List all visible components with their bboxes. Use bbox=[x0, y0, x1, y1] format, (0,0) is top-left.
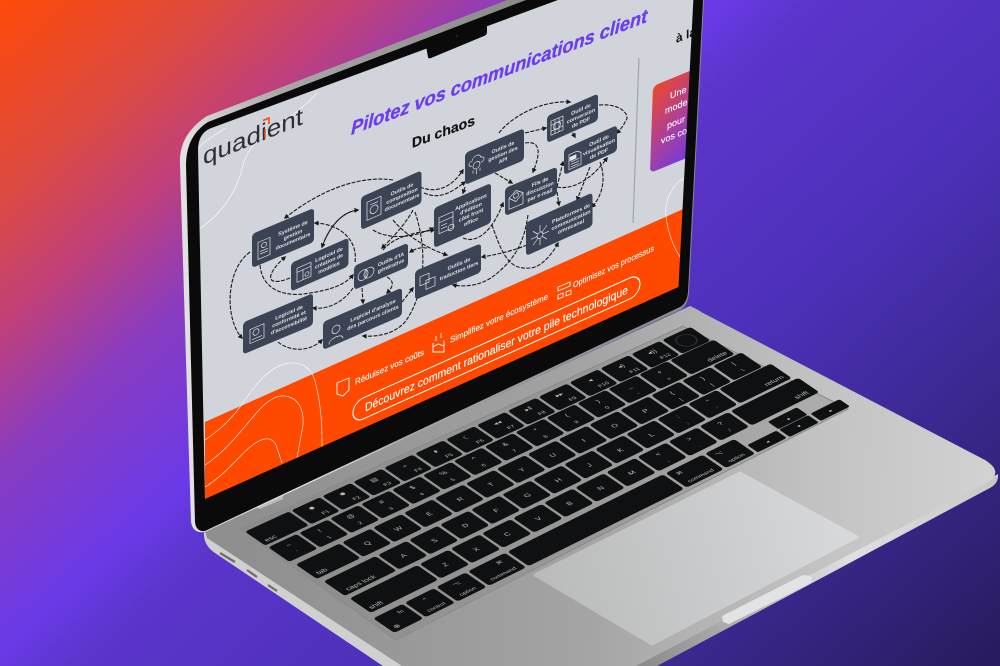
box: Outil de conversion de PDF bbox=[547, 94, 598, 143]
box: Outils de traduction tiers bbox=[415, 243, 481, 300]
function key row: ◂) bbox=[616, 364, 627, 370]
function key row: F7 bbox=[506, 424, 517, 431]
hinge piece bbox=[254, 495, 283, 509]
icon: compliance bbox=[250, 324, 264, 344]
box: Logiciel de création de modèles: création de bbox=[315, 253, 343, 271]
benefits row bbox=[337, 243, 654, 396]
shift key row: , bbox=[665, 459, 672, 463]
keyboard bbox=[245, 327, 850, 633]
shift key row: V bbox=[534, 516, 544, 522]
home key row: K bbox=[616, 447, 626, 453]
box: Outil de visualisation de PDF: Outil de bbox=[589, 134, 609, 149]
home key row: return bbox=[763, 375, 786, 387]
decorative contour lines top-left bbox=[197, 93, 317, 230]
home key row: F bbox=[492, 508, 502, 514]
function key row: ✹ bbox=[337, 491, 349, 498]
qwerty key row: [ bbox=[679, 398, 685, 402]
box: Système de gestion documentaire: Système de bbox=[278, 220, 308, 238]
number key row: ) bbox=[595, 399, 602, 404]
right column heading fragment: à la bbox=[676, 24, 697, 46]
qwerty key row: } bbox=[699, 376, 708, 381]
qwerty key row: W bbox=[393, 525, 405, 532]
box: Outils de traduction tiers: Outils de bbox=[448, 257, 470, 272]
bottom key row: ⌥ bbox=[714, 451, 725, 457]
number key row: 3 bbox=[388, 507, 395, 511]
function key row: ◂ bbox=[586, 378, 595, 383]
bottom key row: ⌥ bbox=[452, 581, 463, 587]
box: Plateformes de communication omnicanal: Plateformes de bbox=[552, 203, 590, 226]
contour lines on band bbox=[205, 363, 322, 487]
icon: templates bbox=[297, 262, 311, 282]
home key row bbox=[324, 364, 792, 596]
box: Applications d'édition côté front office: d'édition bbox=[460, 201, 483, 217]
function key row: ♦ bbox=[432, 449, 441, 454]
box: Plateformes de communication omnicanal bbox=[526, 193, 592, 256]
gradient promo panel: moderne bbox=[665, 91, 700, 116]
number key row: & bbox=[501, 442, 511, 448]
box: Fils de discussion par e-mail: discussion bbox=[526, 180, 554, 198]
qwerty key row: { bbox=[668, 391, 677, 396]
icon: network bbox=[531, 224, 549, 246]
function key row: ▸‖ bbox=[523, 406, 535, 413]
benefit: optimise processes: Optimisez vos processus bbox=[573, 243, 654, 290]
shift key row: . bbox=[696, 444, 703, 448]
icon: API cloud bbox=[468, 154, 484, 174]
bottom key row: control bbox=[426, 602, 448, 613]
shift key row: M bbox=[627, 470, 638, 476]
right side edge bbox=[632, 474, 998, 666]
box: Applications d'édition côté front office: Applications bbox=[455, 193, 487, 213]
number key row: 1 bbox=[326, 535, 334, 540]
qwerty key row: tab bbox=[315, 567, 330, 576]
box: Outils de composition documentaire: documentaire bbox=[385, 192, 419, 214]
bottom key row: ▸ bbox=[828, 409, 835, 413]
box: Logiciel de conformité et d'accessibilité: conformité et bbox=[272, 310, 306, 330]
bottom key row: option bbox=[727, 453, 747, 464]
box: Outils de gestion des API: Outils de bbox=[492, 140, 514, 156]
home key row: " bbox=[705, 399, 714, 404]
function key row: ☾ bbox=[461, 434, 473, 441]
box: Fils de discussion par e-mail bbox=[505, 167, 557, 216]
number key row: # bbox=[378, 500, 387, 505]
shift key row: C bbox=[503, 531, 513, 537]
box: Logiciel de conformité et d'accessibilité bbox=[243, 293, 313, 354]
qwerty key row: P bbox=[641, 408, 651, 414]
bottom key row: command bbox=[489, 566, 519, 582]
icon: envelope bbox=[509, 188, 523, 209]
thumb notch bbox=[722, 575, 812, 624]
trackpad bbox=[535, 473, 857, 644]
home key row: caps lock bbox=[344, 574, 379, 592]
box: Outil de conversion de PDF: Outil de bbox=[571, 103, 591, 117]
qwerty key row: | bbox=[731, 362, 738, 366]
box: Outils de composition documentaire bbox=[361, 170, 422, 230]
box: Outils de composition documentaire: composition bbox=[386, 186, 418, 206]
function key row: F9 bbox=[568, 396, 579, 402]
bottom key row: ⌘ bbox=[674, 470, 685, 476]
function key row: F12 bbox=[659, 353, 673, 360]
number key row: _ bbox=[624, 384, 634, 390]
qwerty key row: I bbox=[581, 439, 588, 443]
number key row: 8 bbox=[542, 435, 550, 439]
box: Applications d'édition côté front office: côté front bbox=[459, 207, 483, 224]
number key row: ( bbox=[564, 413, 572, 418]
box: Outil de conversion de PDF: conversion bbox=[567, 107, 596, 126]
call to action button: Découvrez comment rationaliser votre pile technologique bbox=[365, 283, 628, 414]
shift key row: < bbox=[654, 452, 663, 457]
function key row: ◂◂ bbox=[492, 420, 504, 427]
shift key row: B bbox=[565, 501, 575, 507]
dashed connector network bbox=[230, 102, 627, 349]
qwerty key row: Q bbox=[363, 540, 374, 547]
box: Logiciel de création de modèles: Logiciel de bbox=[315, 246, 343, 264]
box: Outil de conversion de PDF: de PDF bbox=[572, 116, 591, 130]
number key row: 9 bbox=[573, 420, 581, 425]
logo: quadient bbox=[203, 103, 303, 171]
benefit: simplify ecosystem bbox=[433, 291, 548, 352]
home key row: H bbox=[554, 478, 564, 484]
laptop lid bbox=[180, 0, 704, 532]
bottom key row: fn bbox=[397, 609, 406, 615]
home key row: L bbox=[647, 433, 657, 438]
shift key row: shift bbox=[793, 391, 811, 400]
benefit: reduce costs bbox=[337, 347, 425, 396]
function key row: F6 bbox=[475, 439, 486, 445]
box: Outil de visualisation de PDF: visualisation bbox=[583, 137, 616, 158]
home key row: J bbox=[586, 463, 594, 468]
box: Outils de gestion des API: API bbox=[499, 156, 508, 166]
qwerty key row: O bbox=[610, 423, 621, 429]
shift key row: Z bbox=[441, 562, 451, 568]
bottom key row: ▾ bbox=[796, 424, 803, 429]
bottom key row: ▴ bbox=[785, 417, 792, 421]
box: Outils de gestion des API bbox=[465, 128, 524, 185]
bottom key row bbox=[373, 392, 850, 633]
function key row: F1 bbox=[321, 510, 332, 516]
number key row: ` bbox=[296, 550, 302, 554]
function key row: F10 bbox=[597, 381, 611, 389]
function key row: F4 bbox=[413, 467, 424, 473]
box: Logiciel de conformité et d'accessibilité: d'accessibilité bbox=[271, 316, 307, 337]
orange footer band bbox=[205, 206, 690, 510]
qwerty key row: ] bbox=[710, 383, 716, 387]
qwerty key row: T bbox=[487, 482, 497, 488]
icon: customer bbox=[329, 322, 343, 344]
function key row bbox=[245, 327, 711, 546]
function key row: F2 bbox=[352, 495, 363, 502]
number key row: * bbox=[533, 428, 541, 433]
box: Outils de composition documentaire: Outils de bbox=[391, 182, 413, 198]
shift key row bbox=[350, 378, 819, 613]
box: Fils de discussion par e-mail: Fils de bbox=[532, 176, 548, 189]
icon: translation bbox=[420, 272, 436, 290]
number key row: = bbox=[666, 377, 674, 382]
function key row: ▤ bbox=[368, 477, 380, 484]
home key row: ; bbox=[685, 421, 691, 425]
box: Applications d'édition côté front office: office bbox=[464, 216, 478, 228]
screen bbox=[198, 0, 694, 499]
subheading: Du chaos bbox=[412, 113, 475, 152]
box: Logiciel d'analyse des parcours clients bbox=[323, 288, 402, 350]
box: Logiciel d'analyse des parcours clients: Logiciel d'analyse bbox=[350, 299, 396, 324]
icon: brain bbox=[358, 265, 374, 282]
bottom key row: ⌘ bbox=[494, 559, 505, 566]
qwerty key row: U bbox=[548, 453, 559, 459]
box: Outil de visualisation de PDF bbox=[564, 125, 617, 175]
home key row: S bbox=[430, 538, 440, 544]
bottom key row: ⊕ bbox=[391, 623, 403, 630]
number key row: @ bbox=[345, 513, 357, 520]
box: Système de gestion documentaire: gestion bbox=[284, 228, 303, 242]
benefit: reduce costs: Réduisez vos coûts bbox=[355, 347, 425, 387]
shift key row: > bbox=[685, 437, 694, 442]
function key row: ✹ bbox=[306, 505, 318, 512]
bottom key row: command bbox=[687, 468, 716, 484]
qwerty key row bbox=[296, 352, 762, 579]
keyboard well bbox=[240, 326, 848, 640]
box: Système de gestion documentaire: documentaire bbox=[276, 232, 310, 252]
function key row: ▸▸ bbox=[554, 391, 566, 398]
box: Logiciel de création de modèles bbox=[291, 238, 348, 292]
home key row: A bbox=[399, 553, 409, 559]
shift key row: X bbox=[472, 547, 482, 553]
function key row: ⌕ bbox=[401, 463, 410, 469]
home key row: G bbox=[523, 493, 533, 499]
number key row: delete bbox=[706, 351, 730, 363]
number key row: - bbox=[636, 392, 642, 396]
icon: PDF document bbox=[569, 149, 581, 170]
laptop base bbox=[204, 306, 998, 666]
number key row: 0 bbox=[604, 406, 612, 410]
bottom key row: option bbox=[458, 586, 478, 597]
box: Outils d'IA générative: Outils d'IA bbox=[378, 252, 404, 269]
number key row: 6 bbox=[480, 463, 488, 468]
main title: Pilotez vos communications client bbox=[351, 5, 649, 140]
shift key row: / bbox=[727, 428, 734, 433]
box: Plateformes de communication omnicanal: communication bbox=[551, 209, 591, 232]
function key row: F3 bbox=[382, 481, 394, 487]
number key row: 4 bbox=[419, 492, 426, 497]
box: Fils de discussion par e-mail: par e-mail bbox=[528, 188, 553, 204]
benefit: optimise processes bbox=[558, 243, 654, 299]
number key row: 2 bbox=[357, 521, 365, 526]
shift key row: N bbox=[596, 486, 606, 492]
number key row: $ bbox=[408, 485, 418, 491]
gradient promo panel: Une solution bbox=[670, 70, 720, 101]
number key row: ~ bbox=[285, 543, 294, 548]
qwerty key row: Y bbox=[518, 467, 528, 473]
box: Logiciel de conformité et d'accessibilité: Logiciel de bbox=[275, 305, 303, 322]
function key row: F5 bbox=[444, 453, 455, 459]
benefit: simplify ecosystem: Simplifiez votre écosystème bbox=[450, 291, 548, 345]
box: Outil de visualisation de PDF: de PDF bbox=[590, 147, 609, 161]
box: Logiciel de création de modèles: modèles bbox=[318, 261, 340, 276]
vertical divider bbox=[633, 58, 639, 223]
number key row: ^ bbox=[471, 456, 480, 462]
icon: conversion bbox=[551, 116, 563, 135]
box: Logiciel d'analyse des parcours clients: des parcours clients bbox=[347, 304, 399, 332]
number key row: % bbox=[438, 470, 450, 477]
box: Outils de traduction tiers: traduction tiers bbox=[440, 261, 478, 283]
qwerty key row: E bbox=[425, 511, 435, 517]
gradient promo panel: pour bbox=[667, 114, 685, 131]
number key row: + bbox=[656, 370, 665, 375]
function key row: F8 bbox=[537, 410, 548, 416]
box: Outils de gestion des API: gestion des bbox=[488, 146, 518, 164]
icon: composition bbox=[367, 196, 381, 220]
box: Plateformes de communication omnicanal: omnicanal bbox=[558, 218, 585, 236]
number key row: 7 bbox=[511, 449, 519, 454]
box: Outils d'IA générative: générative bbox=[378, 258, 404, 275]
box: Outils d'IA générative bbox=[354, 243, 408, 290]
gradient promo panel bbox=[650, 71, 690, 172]
number key row: 5 bbox=[450, 478, 457, 482]
number key row: ! bbox=[317, 529, 324, 533]
function key row: F11 bbox=[628, 367, 642, 374]
function key row: esc bbox=[263, 534, 280, 543]
qwerty key row: R bbox=[456, 497, 466, 503]
screen background bbox=[180, 0, 710, 510]
home key row: : bbox=[675, 415, 682, 419]
qwerty key row: \ bbox=[741, 368, 747, 372]
box: Système de gestion documentaire bbox=[252, 208, 314, 268]
shift key row: ? bbox=[716, 421, 726, 427]
number key row bbox=[268, 340, 735, 562]
deck surface bbox=[205, 306, 995, 666]
home key row: D bbox=[461, 523, 471, 529]
function key row: ◂)) bbox=[646, 349, 659, 356]
contour arc on right panel bbox=[666, 178, 684, 258]
box: Applications d'édition côté front office bbox=[434, 183, 491, 248]
icon: document bbox=[258, 237, 270, 259]
bottom key row: ^ bbox=[422, 598, 430, 602]
shift key row: shift bbox=[368, 600, 385, 610]
camera notch bbox=[426, 22, 487, 58]
bottom key row: ◂ bbox=[765, 440, 772, 445]
home key row: ' bbox=[716, 407, 722, 410]
left side edge with ports bbox=[204, 532, 410, 666]
gradient promo panel: vos communications bbox=[661, 102, 743, 146]
icon: editing app bbox=[439, 211, 454, 236]
